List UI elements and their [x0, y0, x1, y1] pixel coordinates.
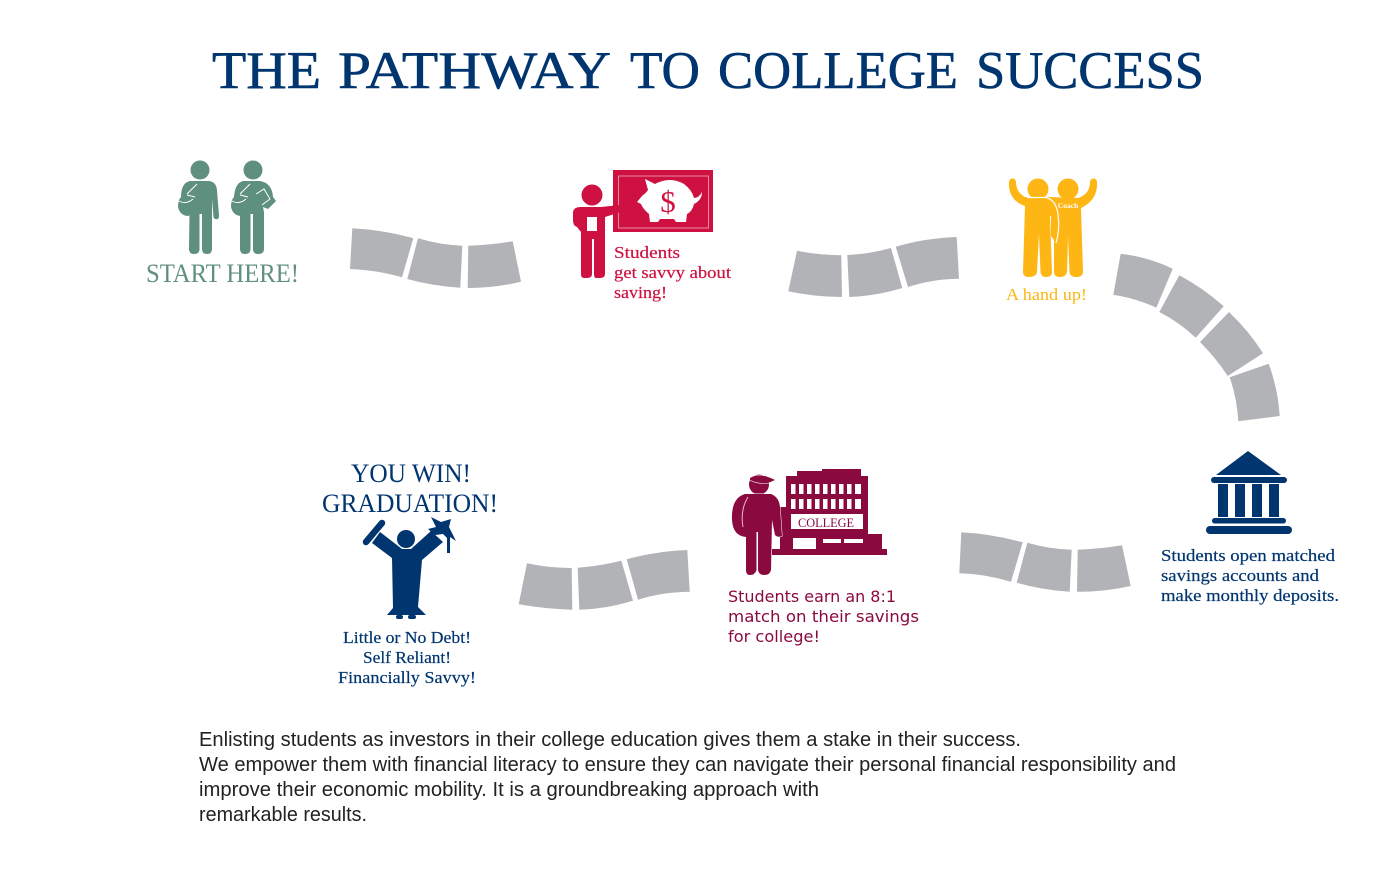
path segment group 2 [788, 237, 959, 297]
path segment group 1 [350, 228, 521, 288]
panel: matched savings [1161, 451, 1339, 605]
text: outcomes: Self Reliant! [363, 648, 451, 667]
title [212, 42, 1204, 100]
title: PATHWAY [338, 42, 611, 100]
icon: two students with backpacks [178, 160, 276, 254]
label: a hand up: A hand up! [1006, 285, 1087, 304]
title: TO [630, 42, 700, 100]
text: savvy about saving: saving! [614, 283, 667, 302]
text: outcomes: Little or No Debt! [343, 628, 471, 647]
text: savvy about saving: get savvy about [614, 263, 731, 282]
heading: you win [322, 459, 498, 518]
icon: bank building [1206, 451, 1292, 534]
panel: a hand up [1006, 178, 1097, 304]
path segment group 5 [519, 550, 690, 610]
icon: board with piggy bank [613, 170, 713, 232]
text: outcomes [338, 628, 476, 687]
panel: start here [146, 160, 299, 288]
text: college match: Students earn an 8:1 [728, 587, 896, 606]
text: matched savings: make monthly deposits. [1161, 586, 1339, 605]
text block: description [199, 729, 1176, 826]
icon: presenter [573, 184, 638, 278]
title: SUCCESS [976, 42, 1204, 100]
icon: college building: COLLEGE [798, 516, 854, 530]
title: THE [212, 42, 321, 100]
text: college match: match on their savings [728, 607, 919, 626]
heading: you win: GRADUATION! [322, 489, 498, 518]
text block: description: improve their economic mobility. It is a groundbreaking approach with [199, 779, 819, 801]
path segment group 3 [1113, 254, 1280, 421]
text block: description: Enlisting students as investors in their college education gives them a stake in their success. [199, 729, 1021, 751]
text: outcomes: Financially Savvy! [338, 668, 476, 687]
panel: college match [728, 469, 919, 646]
label: start here: START HERE! [146, 259, 299, 288]
panel: graduation [322, 459, 498, 687]
text: matched savings [1161, 546, 1339, 605]
title: COLLEGE [718, 42, 958, 100]
text: matched savings: savings accounts and [1161, 566, 1320, 585]
heading: you win: YOU WIN! [351, 459, 471, 488]
icon: graduate [366, 517, 456, 619]
icon: board with piggy bank: $ [660, 184, 676, 219]
icon: student and coach: Coach [1058, 201, 1079, 210]
icon: student with cap [732, 474, 782, 575]
text: savvy about saving [614, 243, 731, 302]
text block: description: We empower them with financial literacy to ensure they can navigate their personal financial responsibility and [199, 754, 1176, 776]
text: college match [728, 587, 919, 646]
text block: description: remarkable results. [199, 804, 367, 826]
text: matched savings: Students open matched [1161, 546, 1336, 565]
text: college match: for college! [728, 627, 820, 646]
panel: savvy about saving [573, 170, 731, 302]
text: savvy about saving: Students [614, 243, 680, 262]
path segment group 4 [959, 532, 1131, 592]
icon: college building [772, 469, 887, 555]
